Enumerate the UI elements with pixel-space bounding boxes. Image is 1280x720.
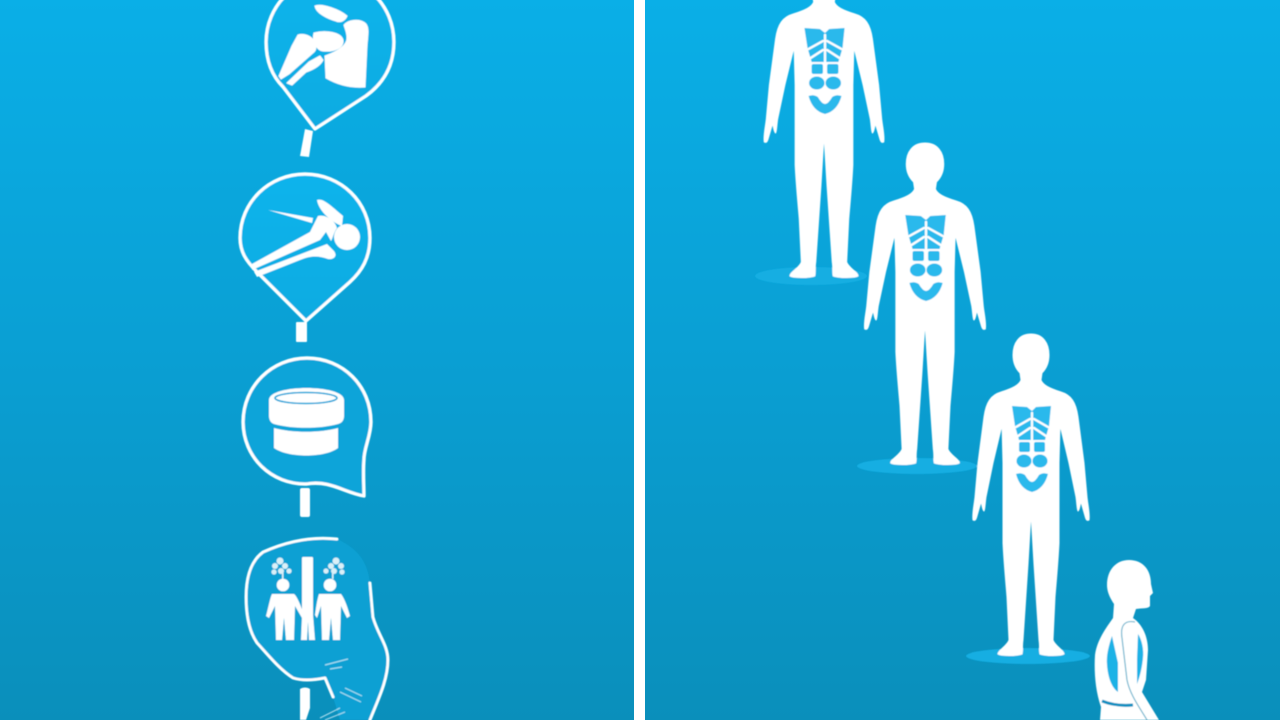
icon: people and pillar <box>266 557 350 640</box>
figure 1 <box>755 0 884 285</box>
pin: shoulder joint <box>266 0 394 129</box>
floor shadow <box>966 648 1090 664</box>
figure 3 <box>966 334 1090 664</box>
icon: left foliage <box>271 558 292 579</box>
sketch marks <box>320 659 362 720</box>
connector <box>300 129 313 157</box>
icon: right foliage <box>323 558 345 579</box>
connector <box>296 322 307 342</box>
connector <box>300 688 310 720</box>
floor shadow <box>755 267 867 285</box>
floor shadow <box>857 458 977 474</box>
pin: elbow joint <box>240 174 370 321</box>
icon: jar <box>269 388 344 456</box>
pin: two people <box>246 538 388 720</box>
panel: human figures <box>755 0 1159 720</box>
center divider <box>634 0 645 720</box>
figure 4: side view <box>1095 560 1159 720</box>
figure 2 <box>857 143 986 474</box>
panel: joint icon pins <box>240 0 394 720</box>
connector <box>300 488 310 517</box>
pin: jar <box>243 358 371 496</box>
icon: leg bone joint <box>252 200 360 277</box>
icon: shoulder bones <box>279 5 368 87</box>
